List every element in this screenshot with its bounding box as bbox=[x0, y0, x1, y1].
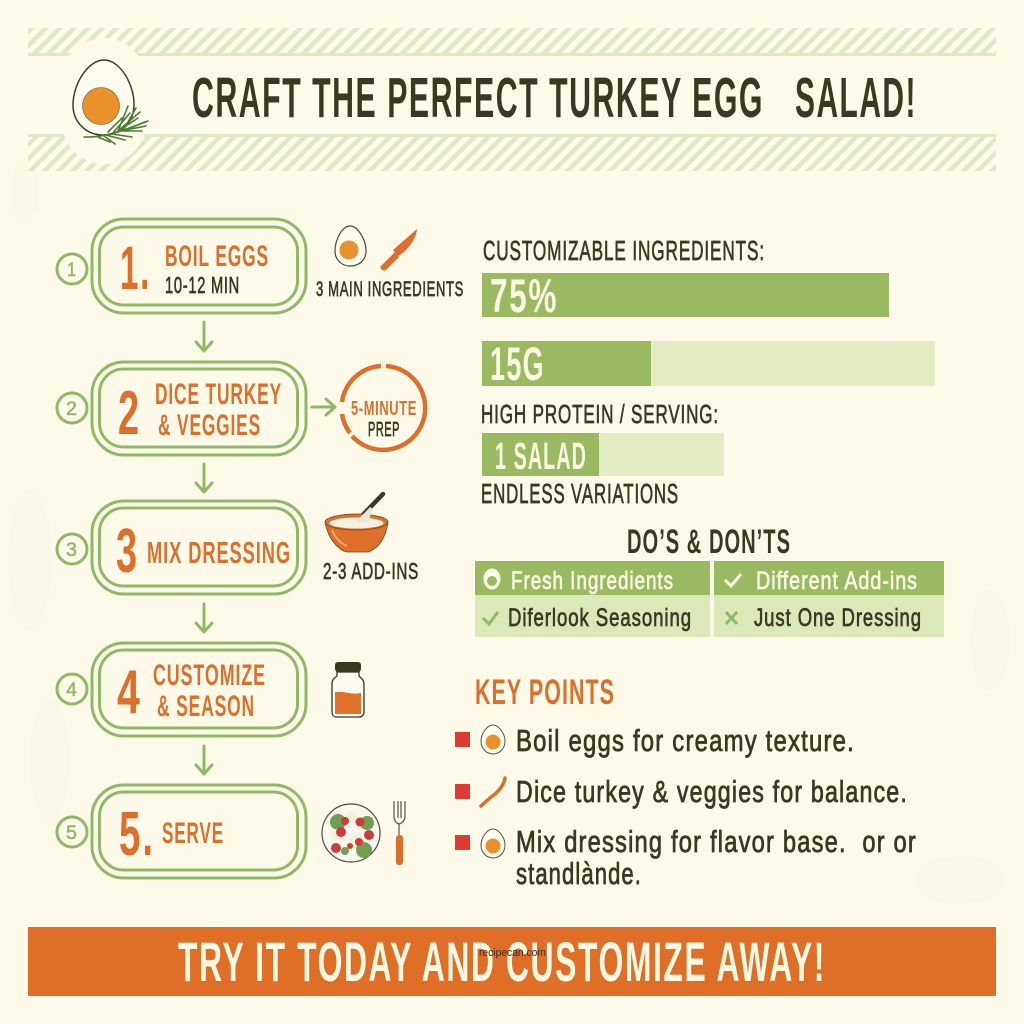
step 4 bbox=[57, 643, 306, 736]
table: do's and don'ts: Just One Dressing bbox=[754, 604, 922, 632]
key point 2: Dice turkey & veggies for balance. bbox=[516, 774, 908, 809]
icon: fork bbox=[394, 801, 405, 865]
step 5: 5 bbox=[66, 823, 78, 844]
step 3: 3 bbox=[66, 540, 78, 561]
arrow 1 to 2 bbox=[196, 322, 212, 351]
heading: customizable ingredients: CUSTOMIZABLE INGREDIENTS: bbox=[483, 235, 765, 266]
heading: key points: KEY POINTS bbox=[475, 673, 615, 712]
label: 2-3 add-ins: 2-3 ADD-INS bbox=[323, 558, 419, 584]
step 3: MIX DRESSING bbox=[147, 535, 291, 570]
timer: 5-minute prep: 5-MINUTE bbox=[351, 398, 417, 420]
step 1: BOIL EGGS bbox=[165, 240, 269, 273]
timer: 5-minute prep bbox=[342, 366, 425, 450]
header banner bbox=[28, 28, 996, 171]
bar: 15g bbox=[482, 337, 935, 390]
arrow to timer bbox=[312, 399, 335, 415]
label: high protein: HIGH PROTEIN / SERVING: bbox=[481, 399, 719, 429]
label: 3 main ingredients: 3 MAIN INGREDIENTS bbox=[316, 278, 464, 301]
step 2: & VEGGIES bbox=[158, 409, 261, 442]
step 2 bbox=[57, 362, 306, 455]
key point 3 bbox=[455, 824, 917, 891]
icon: egg and knife bbox=[335, 226, 417, 271]
key point 2 bbox=[455, 774, 908, 809]
footer banner: recipecan.com bbox=[479, 947, 546, 959]
label: endless variations: ENDLESS VARIATIONS bbox=[481, 478, 679, 509]
icon: egg with rosemary bbox=[73, 60, 148, 144]
key point 1: Boil eggs for creamy texture. bbox=[516, 723, 855, 758]
step 4: CUSTOMIZE bbox=[153, 659, 266, 692]
bar: 75% bbox=[482, 269, 889, 322]
step 5 bbox=[57, 785, 306, 878]
icon: mixing bowl bbox=[325, 494, 388, 552]
step 5: SERVE bbox=[162, 817, 224, 850]
step 1 bbox=[57, 219, 306, 313]
table: do's and don'ts: Fresh Ingredients bbox=[511, 567, 674, 595]
step 2: 2 bbox=[66, 399, 78, 420]
table: do's and don'ts: Diferlook Seasoning bbox=[508, 604, 692, 632]
step 1: 10-12 MIN bbox=[165, 272, 240, 298]
arrow 2 to 3 bbox=[196, 464, 212, 492]
key point 1 bbox=[455, 723, 855, 758]
bar: 15g: 15G bbox=[490, 337, 545, 390]
step 3: 3 bbox=[116, 517, 139, 586]
table: do's and don'ts bbox=[475, 561, 944, 637]
step 2: DICE TURKEY bbox=[155, 378, 282, 411]
timer: 5-minute prep: PREP bbox=[368, 419, 400, 441]
bar: 75%: 75% bbox=[490, 269, 558, 322]
arrow 4 to 5 bbox=[196, 746, 212, 774]
step 1: 1. bbox=[120, 234, 151, 302]
bar: 1 salad: 1 SALAD bbox=[495, 436, 587, 478]
key point 3: standlànde. bbox=[516, 856, 642, 891]
icon: jar bbox=[332, 662, 364, 717]
step 5: 5. bbox=[119, 800, 155, 869]
table: do's and don'ts: Different Add-ins bbox=[756, 567, 918, 595]
step 4: 4 bbox=[66, 680, 78, 701]
title: SALAD! bbox=[795, 66, 917, 130]
step 4: 4 bbox=[117, 658, 142, 727]
step 2: 2 bbox=[118, 379, 141, 448]
step 4: & SEASON bbox=[157, 690, 255, 723]
step 3 bbox=[57, 501, 306, 594]
heading: do's and don'ts: DO’S & DON’TS bbox=[627, 523, 791, 561]
step 1: 1 bbox=[67, 260, 77, 281]
arrow 3 to 4 bbox=[196, 604, 212, 632]
icon: salad plate bbox=[322, 804, 380, 862]
bar: 1 salad bbox=[482, 433, 724, 478]
